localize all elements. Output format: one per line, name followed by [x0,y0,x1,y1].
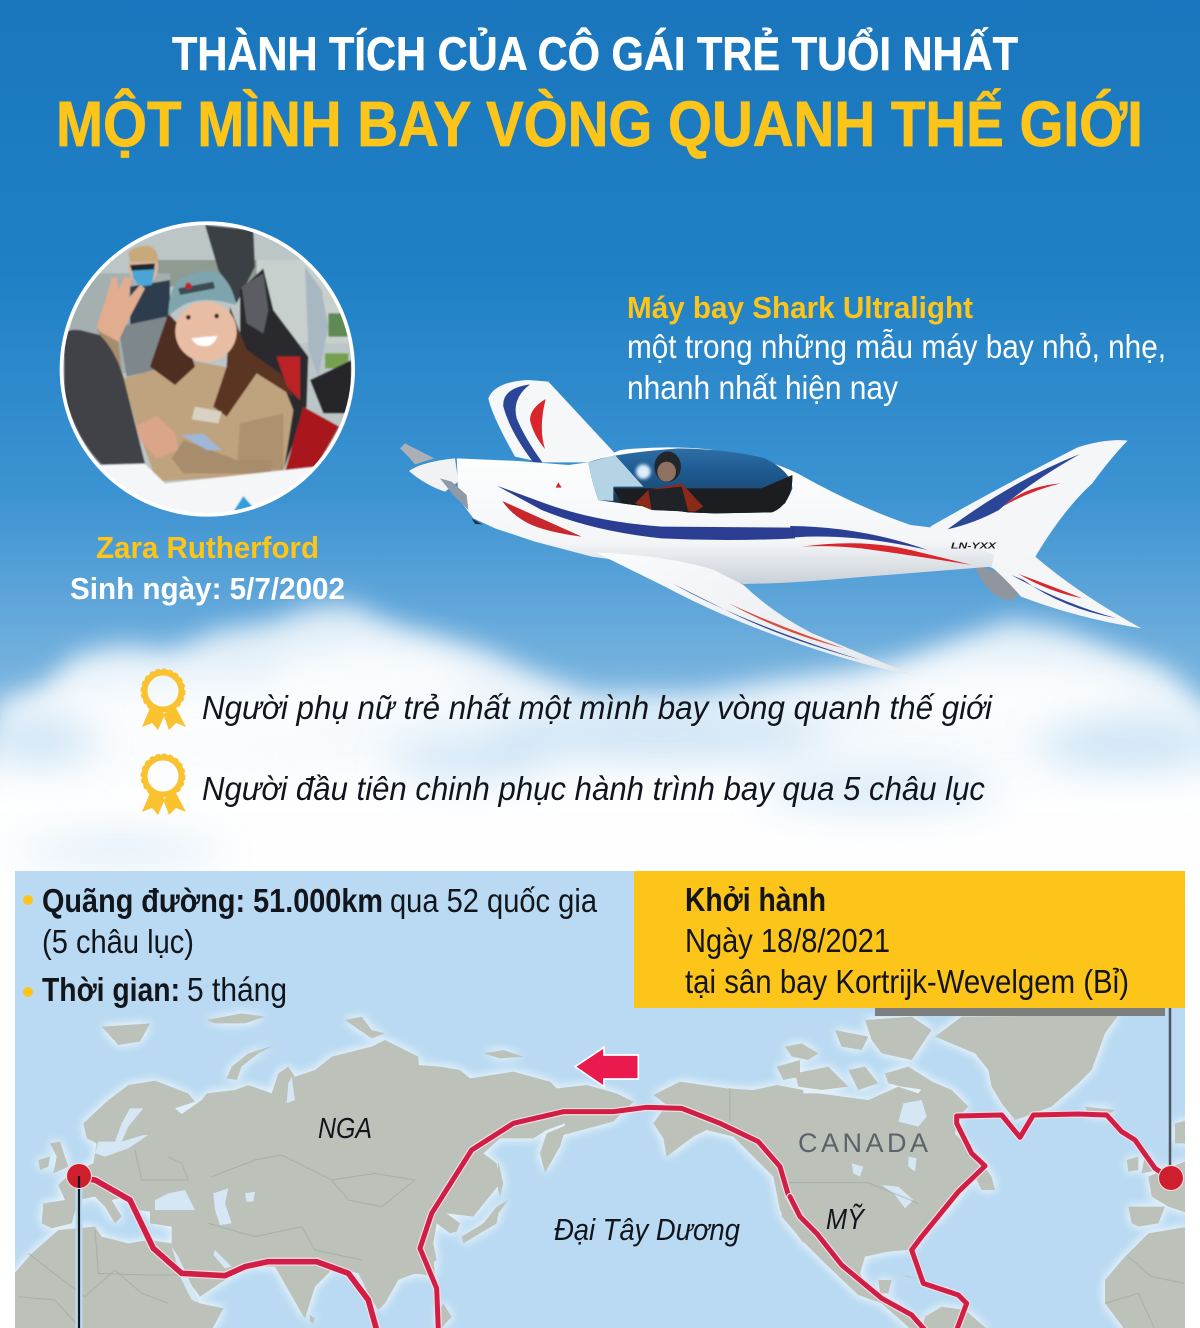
route statistics: (5 châu lục) [42,923,194,960]
Newfoundland [978,1180,995,1190]
departure box: Khởi hành [685,881,826,918]
interior glass [118,317,170,377]
Eurasia west [42,1040,435,1318]
map labels: NGA [318,1113,372,1145]
hand holding phone [136,416,178,458]
achievements [142,670,994,815]
land masses [12,1013,1188,1328]
Philippines [437,1303,452,1328]
medal icon 2 [142,754,186,815]
Western Europe [1148,1160,1188,1213]
arrival pin [66,1163,92,1189]
front blue stripe [497,486,795,540]
far wing [488,380,615,462]
title [56,27,1143,160]
Canadian Arctic [777,1060,800,1080]
Africa [12,1227,223,1328]
man with mask [130,280,170,327]
medal icon 1 [142,670,186,730]
connector line: departure [1169,1008,1171,1177]
rear blue stripe [790,526,928,550]
route statistics: qua 52 quốc gia [390,882,598,919]
clouds [0,603,1200,920]
hair [150,313,195,385]
aircraft caption [627,290,1166,406]
Sakhalin [497,1162,503,1197]
Kamchatka [540,1125,567,1173]
Alaska and western Canada [653,1082,803,1243]
nose and cockpit [400,443,795,540]
propeller [400,443,434,464]
front red stripe [502,501,582,537]
achievement text 1: Người phụ nữ trẻ nhất một mình bay vòng quanh thế giới [202,689,994,726]
Iberia [1128,1207,1165,1227]
Arctic islands [785,1043,818,1060]
waving hand [97,277,145,342]
map labels [318,1113,928,1247]
Novaya Zemlya [227,1045,275,1080]
white fuselage [100,463,314,513]
grey panel [64,330,145,465]
pale blue cloud shadows [0,713,1200,860]
route statistics: Thời gian: [42,971,180,1008]
connector line: arrival [76,1176,82,1328]
achievement text 2: Người đầu tiên chinh phục hành trình bay qua 5 châu lục [202,770,985,807]
map labels: CANADA [798,1128,928,1158]
Eurasia east [398,1063,633,1277]
right canopy frame [305,267,328,377]
map panel [12,871,1188,1328]
New Siberian Islands [483,1050,523,1058]
Britain [50,1142,68,1173]
inland seas [95,1077,927,1303]
Yucatan [878,1280,892,1293]
tailplane shadow [974,565,1019,601]
spinner [409,458,458,492]
grey connector bar [875,1008,1165,1016]
departure box [634,871,1185,1008]
North America [782,1080,995,1328]
departure box: tại sân bay Kortrijk-Wevelgem (Bỉ) [685,963,1129,1000]
Britain and Ireland [1127,1157,1138,1172]
West Africa [1105,1227,1188,1328]
aircraft caption: Máy bay Shark Ultralight [627,290,973,325]
Iceland [1085,1107,1115,1117]
face [175,302,237,362]
route statistics: 5 tháng [187,971,287,1008]
tailplane [989,555,1141,628]
Greenland [935,1015,1118,1120]
map labels: MỸ [826,1202,866,1236]
luggage [310,360,352,413]
Japan [462,1200,508,1243]
canopy pillar [205,225,255,303]
name badge [192,407,222,423]
title: THÀNH TÍCH CỦA CÔ GÁI TRẺ TUỔI NHẤT [172,27,1018,80]
flight suit [123,360,293,482]
Cuba [902,1275,918,1278]
Ireland [38,1157,50,1170]
country borders [18,1088,1185,1328]
Svalbard [102,1023,150,1045]
aircraft caption: nhanh nhất hiện nay [627,369,898,406]
person name and birth date: Zara Rutherford [96,530,319,565]
rear red stripe [802,543,972,565]
route statistics [23,882,598,1008]
tail and rear fuselage [457,440,1141,675]
departure box: Ngày 18/8/2021 [685,922,890,959]
South America [922,1307,988,1328]
route statistics: Quãng đường: 51.000km [42,882,383,919]
seat [240,268,308,470]
pilot [635,451,703,512]
canopy glass [588,448,792,513]
photo: Zara Rutherford [60,221,355,517]
person name and birth date [70,530,345,606]
tail registration: LN-YXX [951,542,998,551]
Franz Josef Land [207,1013,265,1023]
person name and birth date: Sinh ngày: 5/7/2002 [70,571,345,606]
fuselage [457,447,994,584]
Severnaya Zemlya [345,1017,385,1038]
map labels: Đại Tây Dương [554,1212,740,1247]
flight route [80,1107,1170,1328]
departure pin [1158,1165,1184,1191]
tail fin [930,440,1128,568]
direction arrow [575,1047,638,1087]
cap [168,271,236,316]
near wing [596,553,913,675]
aircraft: Shark Ultralight [400,380,1141,675]
